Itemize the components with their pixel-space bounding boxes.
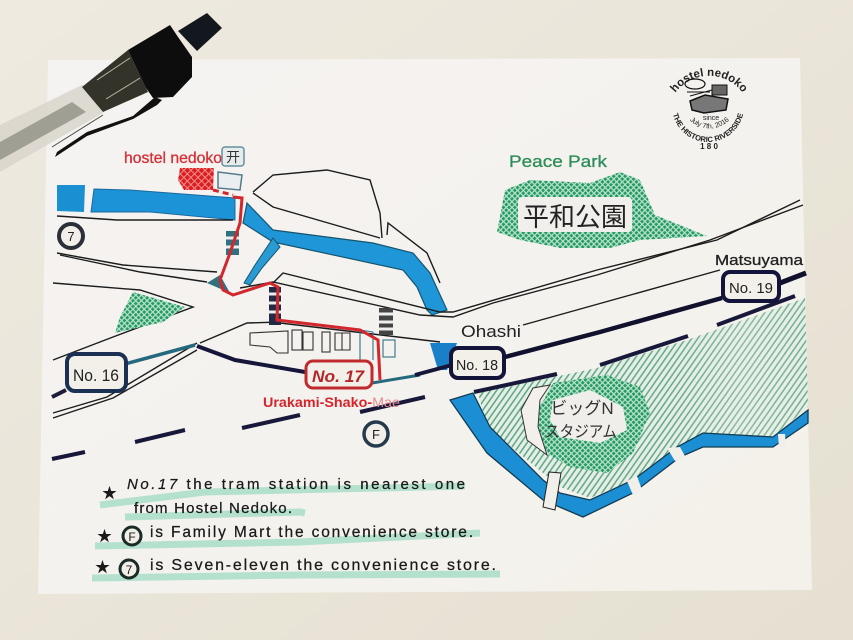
stadium: スタジアム [545,423,617,441]
buildings [250,330,395,362]
Peace Park area: 平和公園 [523,202,627,232]
icon: FamilyMart marker [364,422,388,446]
legend notes: 7 [126,563,133,577]
stamp: hostel nedoko: July 7th, 2016 [690,117,728,130]
note: Family Mart: ★ [97,528,112,545]
station: No. 18: No. 18 [456,357,498,374]
legend notes: No.17 the tram station is nearest one [127,476,465,493]
label: hostel nedoko: hostel nedoko [124,150,222,167]
river: main channel [243,203,808,517]
icon: shrine gate [222,147,244,166]
legend notes: is Family Mart the convenience store. [150,524,473,541]
legend notes: from Hostel Nedoko. [134,500,292,517]
label: Urakami-Shako-Mae: Urakami-Shako-Mae [263,394,400,410]
hostel building [178,168,214,190]
legend notes: F [128,530,136,544]
station: No. 17 [306,361,372,388]
stamp: hostel nedoko: since [703,115,719,122]
stamp: hostel nedoko: THE HISTORIC RIVERSIDE [673,112,744,142]
railway dashed line [52,296,795,459]
stamp: hostel nedoko [670,68,746,151]
stadium: ビッグN [550,399,614,418]
label: Matsuyama: Matsuyama [715,252,804,269]
station: No. 19 [723,272,779,301]
note: Seven-eleven: ★ [95,559,110,576]
roads [53,170,803,418]
legend notes: is Seven-eleven the convenience store. [150,557,496,574]
icon: seven-eleven marker [59,224,83,248]
icon: seven-eleven marker: 7 [67,229,75,244]
green triangular park [115,292,185,333]
station: No. 16 [67,354,126,391]
tram line [52,273,806,397]
walking route in red [213,190,380,380]
neighbour building [218,172,242,190]
green hatched riverside area [478,298,808,498]
note: tram station: ★ [102,485,117,502]
pen [0,13,222,172]
stadium [521,375,650,473]
crosswalks [207,231,393,335]
stamp: hostel nedoko: hostel nedoko [670,68,746,92]
station: No. 18 [451,348,504,378]
station: No. 16: No. 16 [73,366,119,385]
river: top-left segments [57,185,235,220]
stamp: hostel nedoko: 1 8 0 [700,142,718,151]
station: No. 19: No. 19 [729,280,773,297]
icon: FamilyMart marker: F [372,427,380,442]
label: Ohashi: Ohashi [461,322,521,341]
station: No. 17: No. 17 [312,367,366,386]
bridges on lower river [543,434,786,510]
icon: shrine gate: 开 [226,149,240,165]
highlight strokes [92,486,500,578]
legend notes [92,476,500,578]
label: Peace Park: Peace Park [509,152,608,171]
Peace Park area [497,172,707,248]
paper sheet [38,58,812,594]
